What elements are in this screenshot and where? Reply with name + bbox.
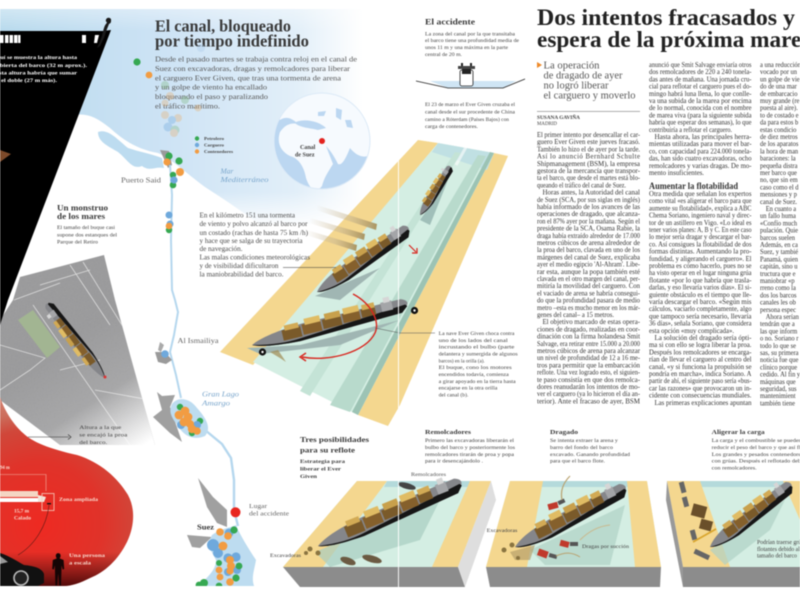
article column 2: guiente obstáculo es el tiempo que lle- [649, 292, 752, 299]
text: La nave: encajarse en la otra orilla [439, 387, 498, 392]
article column 1: ta el barco, que desde el martes está blo- [537, 175, 641, 182]
article column 1: rar esta, aunque la popa también esté [537, 269, 640, 276]
panel: remolcadores: remolcadores tirarán de proa y popa [425, 453, 515, 458]
water [253, 143, 494, 415]
article column 2: das, han sido cuatro excavadoras, ocho [649, 156, 752, 163]
article column 2: Aumentar la flotabilidad [649, 181, 738, 191]
article column 1: El objetivo marcado de estas opera- [542, 319, 641, 326]
article column 2: partir de ahí, el siguiente paso sería «bus- [649, 378, 752, 385]
block diagram 1 [283, 471, 496, 587]
article column 2: dos remolcadores de 220 a 240 tonela- [649, 69, 752, 76]
article column 2: co. Así consigues la flotabilidad de dos [649, 241, 752, 248]
panel: aligerar la carga: con remolcadores. [712, 466, 757, 472]
article column 3, clipped at page edge: da para estos b [760, 119, 799, 127]
article column 2: va una subida de la marea por encima [649, 98, 752, 105]
Suez gulf [187, 478, 256, 590]
article column 2: Hasta ahora, las principales herra- [654, 134, 752, 141]
Gran Lago Amargo: Gran Lago [202, 392, 240, 398]
article column 3, clipped at page edge: o no. Soriano r [760, 335, 799, 343]
article column 3, clipped at page edge: un fallo huma [760, 213, 796, 220]
article column 2: La solución del dragado sería ópti- [654, 335, 752, 342]
port said dots [163, 152, 184, 233]
article column 2: canal, «y si funciona la propulsión se [649, 364, 752, 371]
blob labels: a escala [69, 560, 91, 566]
subhead [537, 60, 636, 102]
label: Lugar del accidente [249, 503, 289, 518]
panel: aligerar la carga: flotantes debido al [757, 546, 800, 553]
article column 2: aumente su flotabilidad», explica a ABC [649, 205, 752, 212]
article column 1: Shipmanagement (BSM), la empresa [537, 161, 640, 168]
article column 2: mento insuficientes. [649, 170, 704, 177]
canal map [121, 150, 289, 590]
sand banks [220, 140, 438, 365]
byline [537, 111, 640, 127]
text: wind paragraph: En el kilómetro 151 una tormenta [200, 212, 295, 220]
text: depth: el barco tiene una profundidad media de [425, 39, 520, 44]
article column 3, clipped at page edge: un golpe de vie [760, 76, 800, 83]
article column 2: pondría en marcha», indica Soriano. A [649, 371, 752, 378]
monster text [57, 226, 118, 246]
article column 1: queando el tráfico del canal de Suez. [537, 182, 626, 189]
article column 3, clipped at page edge: tendrán que a [760, 321, 795, 328]
article column 1: mitiría la movilidad del carguero. Con [537, 283, 641, 290]
legend [195, 136, 233, 154]
intro paragraph [155, 54, 358, 110]
article column 1: metro –esta es mucho menor en los már- [537, 305, 641, 312]
article column 2: cial para reflotar el carguero pues el do- [649, 84, 752, 91]
land of Egypt [0, 114, 362, 600]
main headline: Dos intentos fracasados y [537, 5, 795, 31]
panel: dragado: Dragado [550, 429, 579, 436]
article column 3, clipped at page edge: clínico porque [760, 364, 797, 371]
ship: first position [413, 140, 470, 225]
article column 2: Otra medida que señalan los expertos [649, 191, 752, 198]
panel: dragado: excavado. Ganando profundidad [550, 453, 631, 458]
article column 3, clipped at page edge: do de una mar [760, 83, 798, 91]
panel: remolcadores: Primero las excavadoras liberarán el [425, 439, 515, 444]
blob labels: Calado [14, 516, 32, 522]
leader: wind text [283, 266, 336, 268]
text: depth: La zona del canal por la que transitaba [425, 32, 516, 38]
article column 1: do que la profundidad pasara de medio [537, 298, 641, 305]
heading: canal: El canal, bloqueado [155, 16, 291, 36]
article column 2: 36 días», señala Soriano, que considera [649, 321, 752, 328]
article column 2: como vital «es aligerar el barco para que [649, 198, 752, 205]
article column 1: ver el carguero (ya lo hicieron el día an- [537, 391, 641, 398]
article column 2: mingo habrá luna llena, lo que conlle- [649, 91, 752, 98]
article column 1: clavada en el otro margen del canal, per- [537, 276, 641, 283]
article column 3, clipped at page edge: Suez, y tambié [760, 249, 798, 256]
article column 1: de Suez (SCA, por sus siglas en inglés) [537, 197, 640, 204]
locator globe [274, 92, 371, 190]
intro paragraph: Desde el pasado martes se trabaja contra reloj en el canal de [155, 54, 358, 64]
panel: remolcadores: Remolcadores [411, 473, 446, 478]
article column 1: gestora de la mercancía que transpor- [537, 168, 641, 175]
article column 2: cidente con consecuencias mundiales. [649, 393, 752, 400]
article column 2: mientas utilizadas para mover el bar- [649, 141, 752, 148]
text: altura: se encajó la proa [79, 432, 128, 438]
byline: MADRID [537, 122, 558, 127]
Gran Lago Amargo: Amargo [201, 400, 231, 408]
text: La nave: delantera y sumergida de algunos [439, 352, 518, 358]
legend: Contenedores [204, 149, 233, 154]
caption inside hull: el doble (27 m más). [1, 77, 58, 84]
article column 1: tros para permitir que la embarcación [537, 362, 641, 369]
article column 1: guero Ever Given este jueves fracasó. [537, 139, 640, 146]
text: La nave [439, 332, 518, 398]
panel: dragado [486, 429, 661, 587]
article column 1: Horas antes, la Autoridad del canal [542, 190, 640, 197]
wind bands [306, 205, 377, 251]
intro paragraph: Suez con excavadoras, dragas y remolcadores para liberar [155, 64, 351, 73]
panel: aligerar la carga: tamaño del barco [757, 554, 797, 560]
label: Canal de Suez [295, 145, 316, 158]
article column 1: la proa del barco, clavada en uno de los [537, 247, 640, 254]
article column 1 [537, 132, 641, 405]
article column 3, clipped at page edge: «Confío much [760, 220, 798, 227]
text: wind paragraph: Las malas condiciones meteorológicas [200, 254, 310, 262]
article column 2: Después los remolcadores se encarga- [649, 349, 752, 356]
blob labels: Zona ampliada [59, 498, 99, 503]
text: La nave: a girar apoyado en la tierra hasta [439, 380, 517, 385]
article column 2: rían de llevar el carguero al centro del [649, 357, 752, 364]
panel: remolcadores [270, 429, 515, 587]
label: Suez: Suez [197, 524, 214, 532]
article column 1: operaciones de dragado, que alcanza- [537, 211, 641, 218]
article column 3, clipped at page edge: Panamá, quien [760, 256, 799, 263]
article column 1: Salvage, era retirar entre 15.000 a 20.000 [537, 341, 641, 348]
article column 3, clipped at page edge: la hora de man [760, 148, 799, 155]
article column 2: co, con capacidad para 224.000 tonela- [649, 148, 752, 155]
text: La nave: uno de los lados del canal [439, 339, 509, 344]
article column 3, clipped at page edge: estas condicio [760, 127, 797, 134]
article column 3, clipped at page edge: vocado por un [760, 69, 798, 76]
monster heading: Un monstruo [57, 204, 108, 212]
article column 3, clipped at page edge: cedido. Al fin y [760, 371, 800, 379]
panel: aligerar la carga: con grúas. Después el reflotado debe [712, 460, 800, 465]
text: La nave: encendidos todavía, comienza [439, 373, 510, 378]
label: Canal de Suez: Canal [300, 145, 316, 151]
article column 1: un nivel de profundidad de 12 a 16 me- [537, 355, 641, 362]
article column 2: das antes de mañana. Una jornada cru- [649, 76, 752, 83]
article column 3, clipped at page edge: noticia fue que [760, 357, 798, 364]
article column 3, clipped at page edge: muy grande (re [760, 98, 799, 105]
panel: dragado: Excavadoras [487, 529, 517, 534]
article column 2: darlas, y eso llevaría varios días». El si- [649, 285, 752, 292]
article column 2: de marea viva (para la siguiente subida [649, 112, 752, 119]
text: altura: del barco. [79, 440, 108, 446]
article column 1: ron el 87% ayer por la mañana. Según el [537, 218, 640, 225]
subhead: La operación [544, 60, 600, 72]
panel: aligerar la carga: reducir el peso del barco y que así flote. [712, 446, 800, 451]
text: altura: Altura a la que [79, 425, 122, 431]
text: depth: unos 11 m y una máxima en la parte [425, 46, 509, 51]
article column 1: ciones de dragado, realizadas en coor- [537, 326, 641, 333]
article column 2: varía descargar el barco. «Según mis [649, 299, 752, 306]
panel: aligerar la carga [666, 429, 800, 587]
article column 2: esta opción «muy complicada». [649, 328, 734, 335]
accident marker [230, 507, 240, 517]
car silhouette [0, 553, 44, 586]
subheading: estrategia [300, 459, 345, 480]
panel: aligerar la carga: La carga y el combustible se pueden [712, 439, 800, 444]
heading: canal [155, 16, 309, 50]
legend: Carguero [204, 143, 225, 148]
satellite image: Parque del Retiro [0, 250, 160, 450]
blob labels: 94 m [0, 466, 10, 471]
leader: La nave [375, 328, 435, 333]
label: Mar Mediterraneo: Mar [220, 166, 233, 176]
text: altura [79, 425, 128, 446]
article column 3, clipped at page edge: dos los barcos [760, 292, 797, 299]
subheading: estrategia: Estrategia para [300, 459, 345, 465]
article column 1: márgenes del canal de Suez, explicaba [537, 254, 640, 261]
text: wind paragraph: un costado (rachas de hasta 75 km /h) [200, 230, 308, 237]
monster heading: de los mares [57, 212, 105, 221]
article column 3, clipped at page edge: barcos suelen [760, 235, 796, 242]
label: Lugar del accidente: del accidente [249, 510, 289, 518]
article column 3, clipped at page edge: seguridad, sus [760, 386, 797, 393]
article column 3, clipped at page edge: de los aparatos [760, 141, 799, 148]
article column 2: fundidad, y aligerando el carguero». El [649, 256, 752, 263]
heading: canal: por tiempo indefinido [155, 32, 309, 50]
intro paragraph: bloqueando el paso y paralizando [155, 92, 268, 101]
retiro park pond [18, 310, 60, 358]
panel: remolcadores: Remolcadores [425, 429, 471, 436]
article column 3, clipped at page edge: de diez metros [760, 134, 798, 141]
article column 1: genes del canal– a 15 metros. [537, 312, 614, 319]
article column 2: ha visto operar en el lugar ninguna grúa [649, 270, 752, 277]
monster heading [57, 204, 108, 221]
article column 2: cálculos, vaciarlo completamente, algo [649, 306, 752, 313]
text: La nave: barcos) en la orilla (a). [439, 359, 485, 364]
article column 3, clipped at page edge: capitán, sino u [760, 263, 798, 271]
article column 1: terior). Ante el fracaso de ayer, BSM [537, 398, 640, 405]
article column 1: el vaciado de arena se habría consegui- [537, 290, 641, 297]
article column 3, clipped at page edge: las que inform [760, 328, 798, 335]
article column 1: metros cúbicos de arena para alcanzar [537, 348, 641, 355]
marker a [259, 348, 266, 356]
article column 3, clipped at page edge: Además, en ca [760, 242, 798, 249]
article column 3, clipped at page edge: rreno como la [760, 285, 796, 292]
article column 2: car las razones» que provocaron un in- [649, 385, 752, 392]
article column 3, clipped at page edge: pulación. Quie [760, 227, 798, 235]
text: wind paragraph: de navegación. [200, 246, 243, 253]
article column 2: tener varios planes: A, B y C. En este caso [649, 227, 752, 234]
arrow: bow height [28, 434, 71, 440]
monster text: El tamaño del buque casi [57, 226, 116, 231]
monster text: Parque del Retiro [57, 240, 99, 246]
article column 3, clipped at page edge: canal de Suez. [760, 199, 797, 206]
text: route: carga de contenedores. [425, 125, 478, 130]
panel: remolcadores: para ir desencajándolo . [425, 460, 483, 465]
blob labels [0, 466, 105, 566]
article column 1: dores reanudarán los intentos de mo- [537, 384, 641, 391]
article column 2: que tampoco sería necesario, llevaría [649, 313, 752, 320]
subhead: de dragado de ayer [544, 70, 623, 82]
panel: aligerar la carga: Los grandes y pesados contenedores [712, 453, 800, 458]
panel: dragado: barro del fondo del barco [550, 446, 614, 451]
red magnified blob [0, 397, 133, 586]
article column 3, clipped at page edge: tructura que e [760, 271, 796, 278]
article column 3, clipped at page edge [760, 62, 800, 407]
ship over the park [45, 302, 105, 377]
text: wind paragraph: de viento y polvo alcanzó al barco por [200, 221, 308, 228]
text: depth: central de 20 m. [425, 53, 462, 58]
article column 3, clipped at page edge: máquinas que [760, 379, 796, 386]
marker b [411, 307, 418, 314]
heading: tres posibilidades: Tres posibilidades [300, 435, 369, 444]
article column 3, clipped at page edge: a una reducción [760, 62, 800, 69]
article column 1: presidente de la SCA, Osama Rabie, la [537, 226, 640, 233]
text: La nave: incrustando el bulbo (parte [439, 346, 514, 351]
person on deck [97, 18, 111, 48]
article column 3, clipped at page edge: En cuanto a [766, 206, 796, 213]
article column 2: de lo normal, conocida con el nombre [649, 105, 752, 112]
Ismailiya [155, 338, 218, 364]
label: Canal de Suez: de Suez [295, 152, 315, 158]
article column 3, clipped at page edge: canales les ob [760, 299, 797, 307]
text: La nave: del canal (b). [439, 393, 468, 398]
article column 1: Así lo anunció Bernhard Schulte [537, 154, 640, 161]
intro paragraph: el tráfico marítimo. [155, 102, 220, 110]
block diagram 3 [666, 476, 800, 587]
article column 3, clipped at page edge: todo lo que se [760, 343, 796, 350]
article column 1: te paso consistía en que dos remolca- [537, 377, 641, 384]
ship: third position [247, 293, 410, 362]
arrow: ship rotation [300, 294, 376, 361]
article column 2: remolcadores y varias dragas. De mo- [649, 163, 752, 170]
text: wind paragraph: y hace que se salga de su trayectoria [200, 238, 302, 245]
article column 2: habría que esperar dos semanas), lo que [649, 120, 752, 127]
panel: remolcadores: bulbo del barco y posteriormente los [425, 446, 515, 451]
label: Mar Mediterraneo: Mediterráneo [219, 175, 269, 184]
article column 2: formas distintas. Aumentando la pro- [649, 249, 752, 256]
text: La nave: La nave Ever Given choca contra [439, 332, 515, 337]
article column 2: lo mejor sería dragar y descargar el bar- [649, 234, 752, 241]
article column 3, clipped at page edge: to de costado e [760, 112, 799, 119]
article column 3, clipped at page edge: sas, su primera [760, 350, 799, 357]
block diagram 2 [486, 476, 661, 587]
article column 3, clipped at page edge: mantenimient [760, 393, 796, 400]
subhead: el carguero y moverlo [544, 90, 636, 102]
blob labels: 15,7 m [14, 510, 29, 514]
panel: dragado: para que el barco flote. [550, 460, 605, 465]
article column 3, clipped at page edge: caso como el d [760, 184, 799, 191]
cross-section icon [416, 63, 525, 88]
article column 1: reflote. Una vez logrado esto, el siguien- [537, 370, 641, 377]
article column 3, clipped at page edge: también tiene [760, 400, 795, 407]
article column 3, clipped at page edge: Ahora serían [766, 314, 800, 321]
article column 1: El primer intento por desencallar el car- [537, 132, 641, 139]
article column 1: había informado de los avances de las [537, 204, 640, 211]
heading: El accidente: El accidente [425, 18, 475, 26]
Ismailiya: Al Ismailiya [178, 338, 218, 345]
byline: SUSANA GAVIÑA [537, 115, 581, 121]
panel: dragado: Se intenta extraer la arena y [550, 439, 619, 444]
article column 3, clipped at page edge: maniobrar «p [760, 278, 795, 285]
panel: remolcadores: Excavadoras [270, 554, 301, 559]
article column 2: ma si con ello se logra liberar la proa. [649, 342, 752, 349]
main canal illustration [220, 140, 508, 426]
article column 2: contribuiría a reflotar el carguero. [649, 127, 732, 134]
heading: tres posibilidades [300, 435, 369, 454]
person silhouette [52, 553, 64, 585]
Gran Lago Amargo [153, 392, 240, 442]
article column 1: metros cúbicos de arena alrededor de [537, 240, 640, 247]
ships at sea dots [133, 44, 205, 137]
black hull wedge [0, 30, 111, 325]
ship side schematic [0, 474, 54, 555]
intro paragraph: el carguero Ever Given, que tras una tormenta de arena [155, 73, 342, 82]
label: Lugar del accidente: Lugar [249, 503, 268, 510]
article column 3, clipped at page edge: persona espec [760, 307, 796, 314]
article column 2 [649, 62, 752, 407]
article column 2: tor de un astillero en Vigo. «Lo ideal es [649, 220, 752, 227]
heading: tres posibilidades: para su reflote [300, 446, 356, 454]
sea background [0, 9, 362, 224]
text: wind paragraph: y de visibilidad dificultaron [200, 263, 279, 270]
article column 2: Las primeras explicaciones apuntan [654, 400, 752, 407]
text: depth [425, 32, 520, 58]
article column 2: anunció que Smit Salvage enviaría otros [649, 62, 752, 69]
article column 3, clipped at page edge: puesta al aire). [760, 105, 798, 112]
label: Mar Mediterraneo [219, 166, 269, 184]
article column 1: dinación con la firma holandesa Smit [537, 334, 640, 341]
text: wind paragraph: la maniobrabilidad del barco. [200, 272, 284, 278]
text: route: El 23 de marzo el Ever Given cruzaba el [425, 103, 516, 108]
ship: second position [309, 219, 415, 300]
arrow: drift [409, 245, 417, 253]
article column 3, clipped at page edge: mer barco que [760, 170, 797, 177]
subheading: estrategia: liberar el Ever [300, 466, 342, 472]
caption inside hull [0, 55, 88, 84]
text: route [425, 103, 516, 130]
article column 2: problema es cómo hacerlo, pues no se [649, 263, 752, 270]
article column 1: draga había extraído alrededor de 17.000 [537, 233, 641, 240]
blob labels: Una persona [69, 553, 105, 559]
subheading: estrategia: Given [300, 474, 318, 480]
article column 3, clipped at page edge: no, que sin em [760, 177, 798, 184]
legend: Petrolero [204, 136, 225, 141]
article column 3, clipped at page edge: mensiones y p [760, 191, 798, 199]
article column 2: Chema Soriano, ingeniero naval y direc- [649, 213, 752, 220]
page gutter line [397, 115, 400, 590]
text: route: canal desde el sur procedente de China [425, 110, 516, 115]
subhead: no logró liberar [544, 80, 609, 92]
article column 2: flotante «por lo que habría que trasla- [649, 277, 752, 284]
article column 1: También lo hizo el de ayer por la tarde. [537, 146, 640, 153]
text: La nave: El buque, cono los motores [439, 366, 512, 371]
panel: dragado: Dragas por succión [582, 545, 630, 550]
text: route: camino a Róterdam (Países Bajos) con [425, 118, 510, 123]
article column 3, clipped at page edge: baraciones: la [760, 155, 796, 163]
main headline [537, 5, 800, 53]
intro paragraph: y un golpe de viento ha encallado [155, 82, 267, 92]
text: wind paragraph [200, 212, 310, 278]
article column 3, clipped at page edge: pequeña distra [760, 163, 798, 170]
article column 3, clipped at page edge: de embarcacio [760, 91, 798, 98]
Nile delta lagoon [98, 131, 164, 169]
article column 1: ayer el medio egipcio 'Al-Ahram'. Libe- [537, 262, 641, 269]
panel: aligerar la carga: Aligerar la carga [712, 429, 765, 436]
label: Puerto Said: Puerto Said [121, 176, 161, 184]
monster text: supone dos estanques del [57, 233, 118, 238]
